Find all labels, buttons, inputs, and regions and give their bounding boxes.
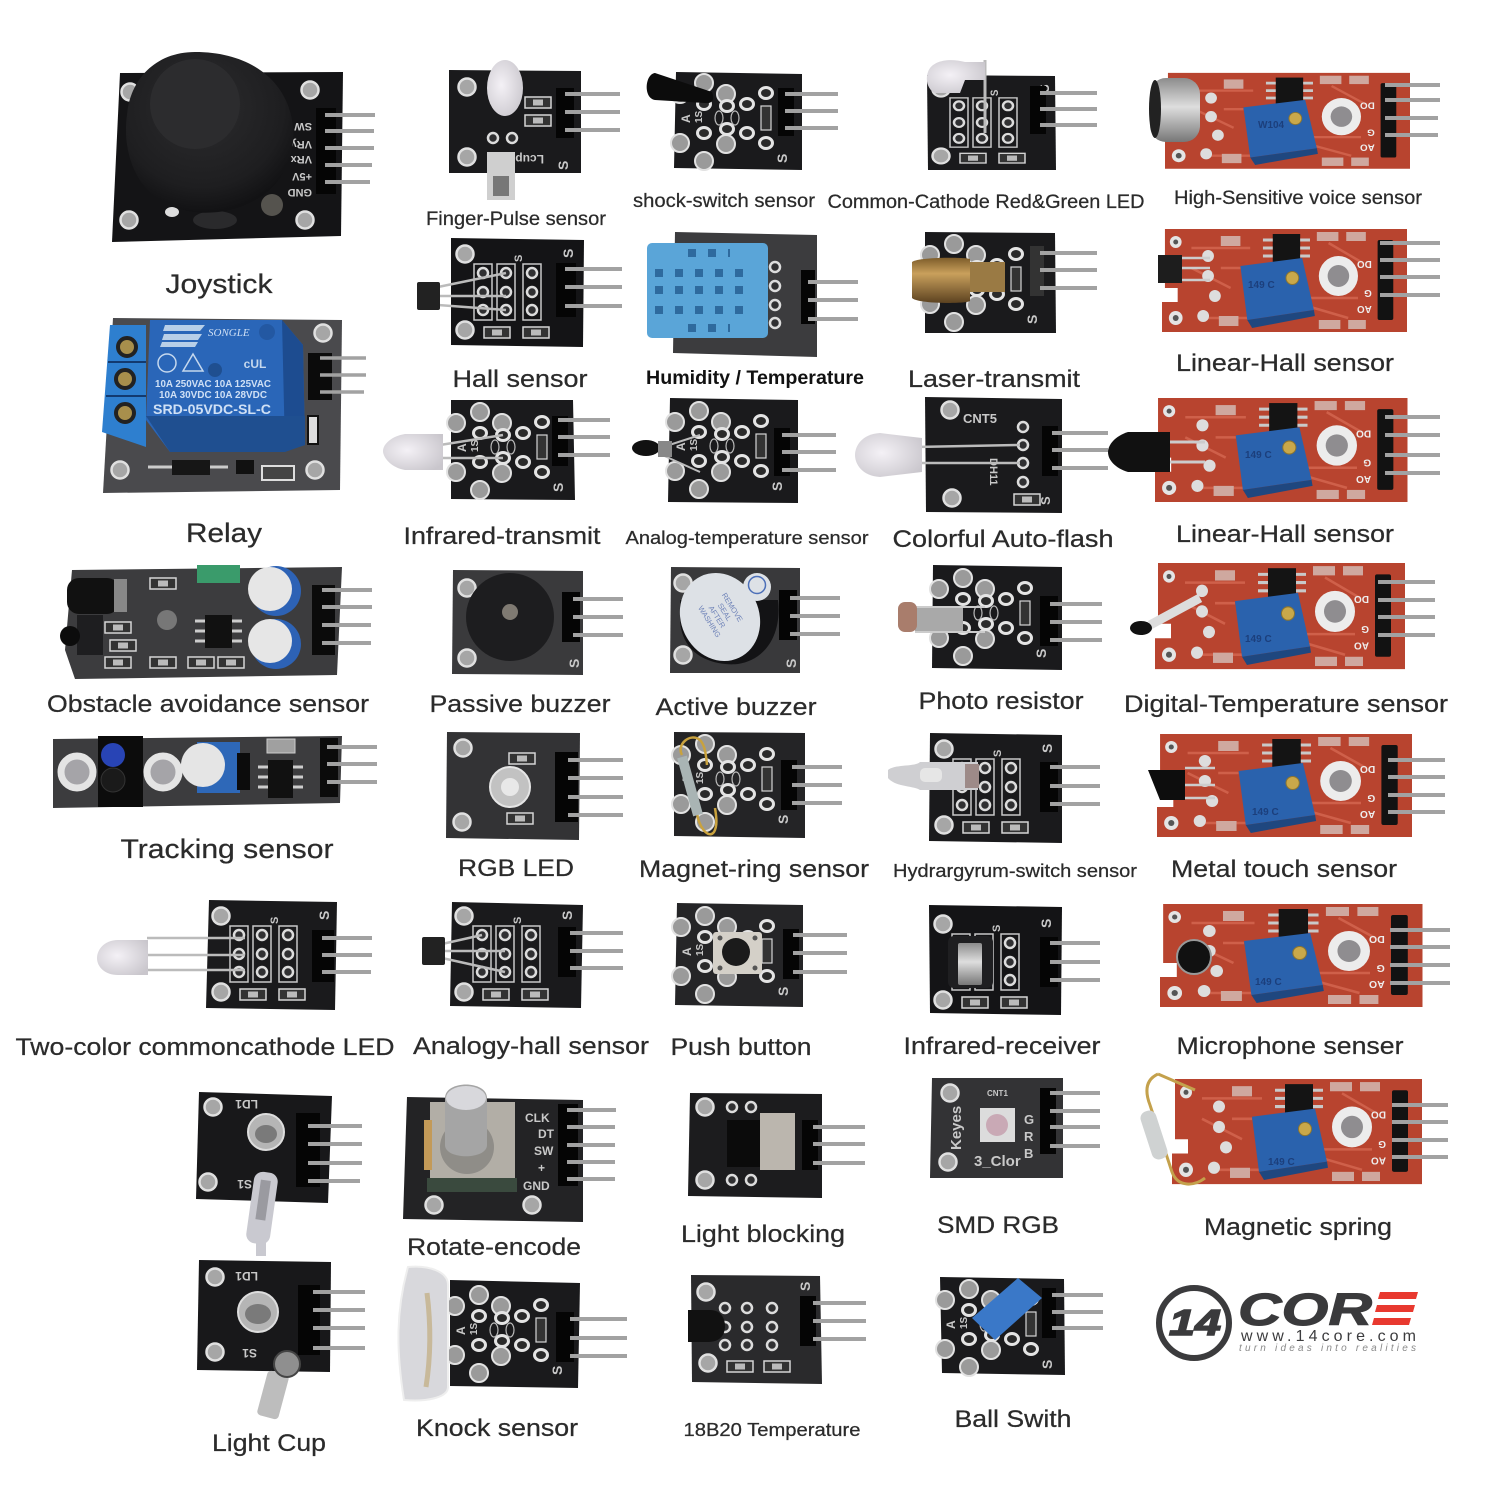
- board: [670, 567, 800, 673]
- module: high-sensitive voice: [1149, 73, 1440, 169]
- module: linear hall 2: [1108, 398, 1440, 502]
- header and pins: [1030, 246, 1097, 296]
- silkscreen: LD1: [235, 1097, 258, 1111]
- label: Hall sensor: Hall sensor: [452, 366, 588, 393]
- board: [1155, 398, 1408, 502]
- label: Infrared-receiver: Infrared-receiver: [904, 1033, 1101, 1060]
- trimmer text: 149 C: [1255, 977, 1282, 988]
- pin labels: GND: [288, 186, 312, 198]
- header and pins: [558, 927, 623, 977]
- pin labels: +: [538, 1161, 545, 1175]
- header and pins: [1030, 86, 1097, 134]
- header and pins: [308, 353, 366, 400]
- label: Push button: Push button: [670, 1034, 812, 1061]
- LED: [238, 1292, 278, 1332]
- label: Hydrargyrum-switch sensor: Hydrargyrum-switch sensor: [893, 861, 1137, 881]
- logo URL: www.14core.com: [1240, 1328, 1416, 1345]
- board: [449, 70, 581, 173]
- board text: [948, 1089, 1034, 1170]
- mercury switch: [256, 1351, 300, 1420]
- label: Colorful Auto-flash: Colorful Auto-flash: [892, 526, 1114, 553]
- relay body: 10A 30VDC 10A 28VDC: [159, 390, 267, 401]
- trimmer text: 149 C: [1248, 280, 1275, 291]
- board: [925, 397, 1062, 513]
- header and pins: [312, 930, 372, 982]
- chip and hole: [157, 610, 242, 648]
- label: Digital-Temperature sensor: Digital-Temperature sensor: [1124, 691, 1448, 718]
- sensor: [417, 273, 506, 310]
- logo tagline: turn ideas into realities: [1239, 1343, 1416, 1354]
- relay body: cUL: [244, 357, 266, 371]
- module: passive buzzer: [452, 570, 623, 675]
- board: [403, 1097, 583, 1222]
- label: Microphone senser: Microphone senser: [1176, 1033, 1404, 1060]
- label: shock-switch sensor: shock-switch sensor: [633, 191, 816, 212]
- module: tracking: [53, 736, 377, 808]
- electret mic: [1177, 940, 1211, 974]
- module: laser transmit: [912, 232, 1097, 333]
- header and pins: [312, 585, 372, 655]
- module: metal touch: [1148, 734, 1445, 837]
- logo: 14CORE: [1159, 1284, 1418, 1358]
- label: Magnet-ring sensor: Magnet-ring sensor: [639, 856, 869, 883]
- LED: [383, 434, 503, 470]
- label: Joystick: Joystick: [166, 269, 273, 299]
- label: Common-Cathode Red&Green LED: Common-Cathode Red&Green LED: [828, 192, 1144, 213]
- header and pins: [1040, 1088, 1100, 1154]
- module: RGB LED: [446, 732, 623, 840]
- board: [196, 1092, 332, 1203]
- relay body: [146, 320, 305, 452]
- header and pins: [552, 416, 610, 466]
- board text: B: [1024, 1146, 1033, 1161]
- header and pins: [556, 88, 620, 138]
- module: two-color LED: [97, 900, 372, 1010]
- board text: DH11: [987, 458, 999, 486]
- relay body: 10A 250VAC 10A 125VAC: [155, 379, 271, 390]
- diode and parts: [148, 416, 318, 480]
- sensor: [422, 935, 505, 972]
- label: Active buzzer: Active buzzer: [656, 694, 817, 721]
- module: digital temperature: [1130, 563, 1435, 669]
- pins: [1392, 1105, 1448, 1157]
- trimmer text: 149 C: [1252, 807, 1279, 818]
- sensor: [688, 1310, 725, 1342]
- label: Metal touch sensor: Metal touch sensor: [1171, 856, 1397, 883]
- pin labels: SW: [534, 1144, 554, 1158]
- module: light cup 1: [196, 1092, 362, 1256]
- pin labels: +5V: [291, 170, 312, 182]
- board: [1172, 1079, 1422, 1184]
- IR emitter and receiver: [60, 578, 127, 655]
- pin labels: CLK: [525, 1111, 550, 1125]
- pin labels: DT: [538, 1127, 555, 1141]
- trimmer text: 149 C: [1245, 450, 1272, 461]
- thermistor: [1130, 598, 1200, 635]
- DHT11 grille: [647, 243, 768, 338]
- thermistor: [632, 435, 700, 472]
- logo ring: [1159, 1288, 1229, 1358]
- label: Infrared-transmit: Infrared-transmit: [404, 523, 601, 550]
- board: [1162, 229, 1407, 332]
- screw terminal: [102, 325, 146, 447]
- LED: [927, 60, 985, 133]
- label: Humidity / Temperature: Humidity / Temperature: [646, 368, 864, 389]
- label: Linear-Hall sensor 2: Linear-Hall sensor: [1176, 521, 1394, 548]
- header and pins: [783, 929, 847, 979]
- pin labels: VRy: [290, 138, 312, 150]
- label: Obstacle avoidance sensor: Obstacle avoidance sensor: [47, 691, 369, 718]
- board: [940, 1277, 1065, 1375]
- label: Relay: Relay: [186, 518, 263, 548]
- board: [450, 1280, 580, 1388]
- header and pins: [1040, 596, 1102, 646]
- label: High-Sensitive voice sensor: High-Sensitive voice sensor: [1174, 188, 1423, 209]
- silkscreen: Lcup: [515, 152, 544, 166]
- header and pins: [298, 1285, 365, 1355]
- board: [668, 398, 798, 503]
- board: [1155, 563, 1405, 669]
- pins: [1385, 85, 1440, 135]
- label: Rotate-encode: Rotate-encode: [407, 1234, 581, 1261]
- header and pins: [781, 760, 842, 810]
- photo interrupter: [727, 1113, 795, 1170]
- label: Analogy-hall sensor: Analogy-hall sensor: [413, 1033, 649, 1060]
- header and pins: [800, 1296, 866, 1346]
- module: hydrargyrum switch: [888, 733, 1100, 843]
- label: Photo resistor: Photo resistor: [918, 688, 1084, 715]
- module: analogy hall: [422, 902, 623, 1008]
- pins: [1378, 582, 1435, 635]
- logo wordmark: COR: [1238, 1284, 1373, 1335]
- receiver: [948, 936, 993, 988]
- module: humidity temperature: [647, 232, 858, 357]
- laser head: [912, 258, 1005, 303]
- board: [929, 733, 1062, 843]
- relay body: SRD-05VDC-SL-C: [153, 401, 271, 417]
- buzzer: WASHING: [696, 604, 723, 639]
- board text: 3_Clor: [974, 1153, 1021, 1170]
- board: [674, 72, 802, 170]
- module: analog temperature: [632, 398, 836, 503]
- label: Passive buzzer: Passive buzzer: [430, 691, 610, 718]
- mercury switch: [245, 1171, 279, 1256]
- label: Analog-temperature sensor: Analog-temperature sensor: [626, 528, 868, 548]
- header and pins: [774, 428, 836, 476]
- pins: [1390, 930, 1450, 983]
- silkscreen: S: [783, 659, 799, 668]
- photoresistor: [898, 602, 985, 632]
- silkscreen: S: [555, 161, 571, 170]
- knob: [126, 52, 293, 213]
- buzzer: [466, 573, 554, 661]
- pin labels: [523, 1111, 555, 1193]
- board: [688, 1093, 822, 1198]
- pins: [1388, 760, 1445, 812]
- header and pins: [1042, 426, 1108, 476]
- tilt switch: [972, 1278, 1042, 1340]
- board: [927, 75, 1056, 170]
- buzzer: AFTER: [707, 604, 728, 630]
- board: [112, 72, 343, 242]
- header and pins: [1040, 937, 1100, 987]
- board: [925, 232, 1056, 333]
- reflective sensor: [98, 736, 143, 807]
- module: SMD RGB: [930, 1078, 1100, 1178]
- trimmers: [197, 565, 301, 669]
- logo red bars: [1372, 1292, 1418, 1325]
- trimmer text: W104: [1258, 120, 1285, 131]
- header and pins: [802, 1120, 865, 1170]
- board text: CNT5: [963, 411, 997, 426]
- board: [452, 570, 583, 675]
- board: [930, 1078, 1063, 1178]
- silkscreen: S1: [237, 1177, 252, 1191]
- module: obstacle avoidance: [60, 565, 372, 679]
- silkscreen: [235, 1269, 258, 1360]
- header and pins: [320, 738, 377, 797]
- header and pins: [316, 108, 375, 194]
- header and pins: [778, 88, 838, 136]
- label: Finger-Pulse sensor: Finger-Pulse sensor: [426, 209, 607, 230]
- relay body: SONGLE: [208, 327, 250, 339]
- label: Magnetic spring: Magnetic spring: [1204, 1214, 1392, 1241]
- board: [673, 232, 817, 357]
- module: rotary encoder: [403, 1084, 616, 1222]
- board: [929, 905, 1062, 1015]
- board: [65, 567, 342, 679]
- photo emitter and detector: [487, 60, 523, 200]
- header and pins: [556, 1312, 627, 1362]
- board text: [963, 411, 1053, 505]
- header and pins: [779, 590, 840, 640]
- mercury tube: [888, 762, 979, 790]
- board: [53, 736, 342, 808]
- label: Light Cup: Light Cup: [212, 1430, 326, 1457]
- header and pins: [1040, 762, 1100, 812]
- pins: [1385, 417, 1440, 473]
- microphone: [1149, 78, 1200, 142]
- IR sensor: [1108, 432, 1205, 472]
- header and pins: [1042, 1288, 1103, 1338]
- transistor: [1148, 768, 1215, 800]
- encoder: [424, 1084, 517, 1192]
- board: [691, 1275, 822, 1384]
- trimmer: [181, 742, 250, 793]
- board: [1157, 734, 1412, 837]
- header and pins: [801, 270, 858, 324]
- pin labels: [288, 120, 312, 198]
- logo number: 14: [1169, 1302, 1221, 1343]
- label: Two-color commoncathode LED: Two-color commoncathode LED: [16, 1034, 394, 1061]
- module: magnetic spring: [1139, 1074, 1448, 1184]
- board: [1160, 904, 1422, 1007]
- buzzer: SEAL: [716, 602, 734, 623]
- silkscreen: S: [797, 1282, 813, 1291]
- label: Linear-Hall sensor: Linear-Hall sensor: [1176, 350, 1394, 377]
- label: Tracking sensor: Tracking sensor: [120, 834, 334, 864]
- pin labels: VRx: [290, 153, 312, 165]
- board: [197, 1260, 331, 1372]
- pin labels: GND: [523, 1179, 550, 1193]
- module: hall sensor: [417, 238, 622, 347]
- silkscreen: LD1: [235, 1269, 258, 1283]
- lower details: [165, 194, 283, 229]
- module: linear hall 1: [1158, 229, 1440, 332]
- label: Ball Swith: Ball Swith: [954, 1406, 1072, 1433]
- LED: [97, 938, 245, 975]
- buzzer: [666, 560, 779, 674]
- trimmer text: 149 C: [1245, 634, 1272, 645]
- header and pins: [558, 1104, 616, 1186]
- board: [674, 732, 805, 838]
- translucent knock body: [398, 1267, 448, 1400]
- label: Light blocking: Light blocking: [681, 1221, 845, 1248]
- label: RGB LED: RGB LED: [458, 855, 574, 882]
- module: active buzzer: [666, 560, 840, 674]
- board: [451, 238, 584, 347]
- module: photo resistor: [898, 565, 1102, 670]
- module: ball switch: [936, 1277, 1103, 1376]
- module: push button: [672, 903, 847, 1007]
- label: Knock sensor: Knock sensor: [416, 1415, 578, 1442]
- header and pins: [556, 263, 622, 317]
- silkscreen: [235, 1097, 258, 1191]
- pins: [1380, 243, 1440, 295]
- module: infrared receiver: [929, 905, 1100, 1015]
- module: light blocking: [688, 1093, 865, 1198]
- silkscreen: S1: [242, 1346, 257, 1360]
- header and pins: [562, 592, 623, 642]
- module: finger pulse: [449, 60, 620, 200]
- buzzer: REMOVE: [720, 591, 745, 623]
- trimmer text: 149 C: [1268, 1157, 1295, 1168]
- pin labels: SW: [294, 120, 312, 132]
- module: microphone senser: [1160, 904, 1450, 1007]
- board: [103, 318, 342, 493]
- reed switch: [681, 738, 716, 834]
- module: light cup 2: [197, 1260, 365, 1420]
- chip: [258, 739, 303, 798]
- sensor: [1158, 255, 1210, 283]
- board: [1165, 73, 1410, 169]
- board text: S: [1038, 496, 1053, 505]
- module: common cathode LED: [927, 60, 1097, 170]
- module: infrared transmit: [383, 400, 610, 500]
- label: Laser-transmit: Laser-transmit: [908, 366, 1080, 393]
- label: 18B20 Temperature: 18B20 Temperature: [684, 1420, 860, 1440]
- board: [450, 902, 583, 1008]
- module: colorful auto-flash: [855, 397, 1108, 513]
- button: [713, 932, 762, 974]
- header and pins: [555, 752, 623, 822]
- board: [932, 565, 1062, 670]
- board: [206, 900, 337, 1010]
- shock cylinder: [647, 73, 713, 103]
- module: 18B20 temperature: [688, 1275, 866, 1384]
- silkscreen: [515, 97, 571, 170]
- board text: Keyes: [948, 1106, 965, 1150]
- LED: [490, 767, 530, 807]
- silkscreen: S: [566, 659, 582, 668]
- reed switch: [1139, 1074, 1205, 1184]
- module: relay: [102, 318, 366, 493]
- label: SMD RGB: SMD RGB: [937, 1212, 1059, 1239]
- module: shock switch: [647, 72, 838, 170]
- board text: G: [1024, 1112, 1034, 1127]
- module: joystick: [112, 52, 375, 242]
- LED: [248, 1114, 284, 1150]
- module: magnet ring: [672, 732, 842, 838]
- board: [446, 732, 580, 840]
- board: [451, 400, 575, 500]
- RGB LED: [980, 1108, 1015, 1142]
- LED: [855, 433, 1020, 477]
- board text: R: [1024, 1129, 1034, 1144]
- mounting rings: [61, 756, 179, 788]
- board: [675, 903, 803, 1007]
- board text: CNT1: [987, 1089, 1008, 1098]
- header and pins: [296, 1113, 362, 1187]
- module: knock sensor: [398, 1267, 627, 1400]
